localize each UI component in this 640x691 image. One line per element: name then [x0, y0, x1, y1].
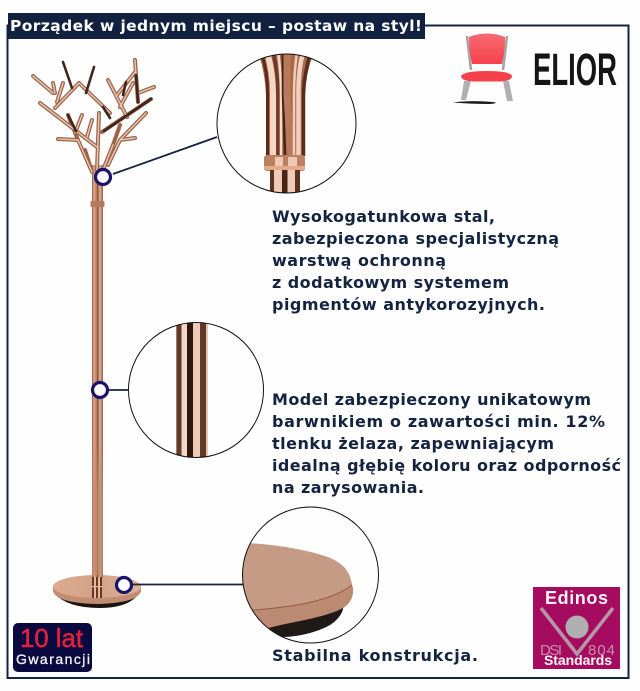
title: Porządek w jednym miejscu – postaw na styl!	[10, 17, 422, 35]
DSI label: DSI	[540, 642, 562, 659]
text block: pigment: tlenku żelaza, zapewniającym	[272, 434, 554, 453]
callout line 3	[132, 584, 243, 586]
text block: steel: zabezpieczona specjalistyczną	[272, 229, 559, 248]
title	[8, 13, 425, 39]
zoom circle: base detail	[240, 507, 378, 643]
marker 1	[96, 170, 110, 184]
text block: steel: Wysokogatunkowa stal,	[272, 207, 495, 226]
text block: pigment: Model zabezpieczony unikatowym	[272, 390, 591, 409]
Standards label: Standards	[544, 652, 612, 668]
stem	[92, 165, 103, 577]
804 label: 804	[588, 642, 615, 659]
zoom circle: collar detail	[217, 52, 356, 196]
coat stand	[33, 60, 154, 608]
collar	[90, 201, 104, 207]
badge: 10 year warranty	[13, 623, 92, 672]
badge: Edinos standards	[533, 587, 620, 669]
text block: steel: pigmentów antykorozyjnych.	[272, 295, 545, 314]
marker 2	[92, 382, 108, 398]
text block: pigment: barwnikiem o zawartości min. 12%	[272, 412, 605, 431]
zoom circle: stem finish detail	[128, 320, 264, 460]
callout line 2	[108, 389, 128, 391]
text block: pigment	[272, 390, 621, 497]
callout line 1	[113, 137, 217, 174]
text block: steel	[272, 207, 559, 314]
base of the stand	[53, 575, 141, 608]
text block: steel: z dodatkowym systemem	[272, 273, 509, 292]
text block: stable construction: Stabilna konstrukcja.	[272, 646, 478, 665]
tree branches	[33, 60, 154, 172]
emblem	[541, 608, 613, 654]
marker 3	[116, 578, 132, 592]
text block: pigment: idealną głębię koloru oraz odporność	[272, 456, 621, 475]
text block: pigment: na zarysowania.	[272, 478, 424, 497]
lower stem tone	[92, 440, 103, 575]
text block: steel: warstwą ochronną	[272, 251, 446, 270]
badge: 10 year warranty: Gwarancji	[16, 651, 90, 667]
icon: red chair logo	[453, 34, 513, 104]
badge: 10 year warranty: 10 lat	[20, 623, 84, 653]
Edinos name: Edinos	[545, 588, 608, 608]
